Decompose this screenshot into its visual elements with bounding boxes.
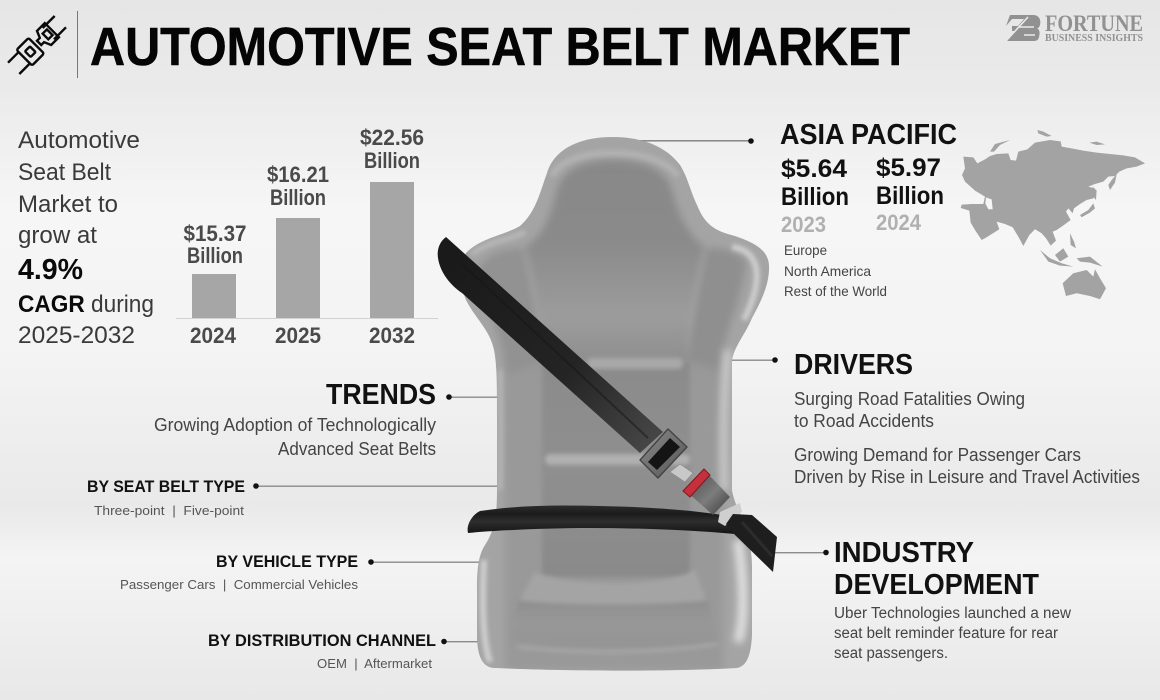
side highlights (483, 560, 490, 662)
seat backrest inner panel (525, 160, 705, 362)
Asia Pacific section: ASIA PACIFIC (780, 119, 957, 151)
Industry Development section: INDUSTRY (834, 537, 974, 569)
bar 2032: 2032 (369, 323, 415, 348)
leader line: By Seat Belt Type (253, 483, 499, 489)
2024 value (876, 154, 944, 235)
bar 2024: $15.37 (184, 221, 246, 246)
2024 value: $5.97 (876, 154, 941, 182)
lumbar highlight band (587, 358, 683, 369)
Drivers section (794, 349, 1140, 487)
2024 value: 2024 (876, 210, 922, 235)
seat belt: lap strap (468, 506, 735, 534)
bar 2024: Billion (187, 243, 243, 268)
logo: Fortune Business Insights (1006, 11, 1143, 44)
right wing (685, 248, 746, 370)
leader line: By Distribution Channel (441, 639, 480, 644)
left wing (480, 248, 536, 361)
bar 2025: Billion (270, 185, 326, 210)
other regions list: North America (784, 263, 871, 279)
logo: Fortune Business Insights: FORTUNE (1045, 11, 1143, 36)
Drivers section: Surging Road Fatalities Owing (794, 389, 1025, 409)
other regions list: Rest of the World (784, 283, 887, 299)
growth statement: Seat Belt (18, 159, 111, 186)
segment: By Vehicle Type: Passenger Cars | Commercial Vehicles (120, 577, 358, 592)
segment: By Seat Belt Type: BY SEAT BELT TYPE (87, 478, 245, 496)
segment: By Vehicle Type: BY VEHICLE TYPE (216, 553, 358, 571)
leader line: Drivers (730, 357, 778, 363)
growth statement: CAGR during (18, 291, 154, 318)
bar 2025: 2025 (275, 323, 321, 348)
bar 2024: 2024 (190, 323, 237, 348)
segment: By Distribution Channel: BY DISTRIBUTION CHANNEL (208, 632, 436, 650)
Trends section (154, 379, 436, 459)
2024 value: Billion (876, 182, 944, 210)
Industry Development section: seat passengers. (834, 645, 948, 662)
Trends section: Advanced Seat Belts (278, 439, 436, 459)
segment: By Seat Belt Type (87, 478, 245, 518)
leader line: Asia Pacific (640, 138, 754, 144)
other regions list: Europe (784, 242, 827, 258)
header divider (77, 11, 78, 78)
cushion highlight (520, 570, 706, 604)
segment: By Distribution Channel (208, 632, 436, 671)
growth statement: Market to (18, 191, 118, 218)
growth statement: 4.9% (18, 254, 83, 286)
growth statement (18, 127, 154, 349)
2023 value: Billion (781, 183, 849, 211)
other regions list (784, 242, 887, 299)
Drivers section: Driven by Rise in Leisure and Travel Activities (794, 467, 1140, 487)
middle highlight band (545, 454, 690, 465)
Trends section: Growing Adoption of Technologically (154, 415, 436, 435)
leader line: Industry Development (775, 550, 829, 555)
Industry Development section (834, 537, 1072, 662)
segment: By Distribution Channel: OEM | Aftermarket (317, 656, 432, 671)
2023 value: $5.64 (781, 155, 847, 183)
bar 2025: $16.21 (267, 162, 329, 187)
illustration: car seat (461, 137, 769, 671)
segment: By Seat Belt Type: Three-point | Five-point (94, 503, 244, 518)
map: Asia Pacific (961, 130, 1145, 299)
seat belt: shoulder strap (438, 237, 663, 453)
seat belt: buckle with red release button (683, 469, 742, 526)
leader line: Trends (446, 394, 499, 400)
front lip highlight (518, 644, 718, 652)
Drivers section: to Road Accidents (794, 411, 934, 431)
growth statement: 2025-2032 (18, 322, 135, 349)
seat lower back panel (542, 362, 690, 577)
seat belt: strap tail (726, 514, 777, 572)
growth statement: grow at (18, 222, 97, 249)
Industry Development section: seat belt reminder feature for rear (834, 625, 1058, 642)
2023 value: 2023 (781, 212, 826, 237)
bar chart: market size (176, 125, 438, 348)
seat cushion (521, 604, 705, 606)
Industry Development section: Uber Technologies launched a new (834, 605, 1072, 622)
segment: By Vehicle Type (120, 553, 358, 592)
leader line: By Vehicle Type (368, 559, 480, 565)
2023 value (781, 155, 849, 237)
Trends section: TRENDS (326, 379, 436, 411)
Drivers section: DRIVERS (794, 349, 913, 381)
title: AUTOMOTIVE SEAT BELT MARKET (90, 17, 910, 77)
growth statement: Automotive (18, 127, 140, 154)
logo: Fortune Business Insights: BUSINESS INSIGHTS (1045, 32, 1143, 44)
bar 2032: Billion (364, 148, 420, 173)
Asia Pacific section (780, 119, 957, 299)
seat belt: latch plate (640, 429, 693, 482)
bar 2032 (360, 125, 424, 348)
bar 2025 (267, 162, 329, 348)
bar 2032: $22.56 (360, 125, 424, 150)
lower seat body (505, 355, 723, 670)
bar 2024 (184, 221, 246, 348)
Industry Development section: DEVELOPMENT (834, 569, 1039, 601)
header icon: seat belt buckle (6, 14, 68, 76)
Drivers section: Growing Demand for Passenger Cars (794, 445, 1081, 465)
